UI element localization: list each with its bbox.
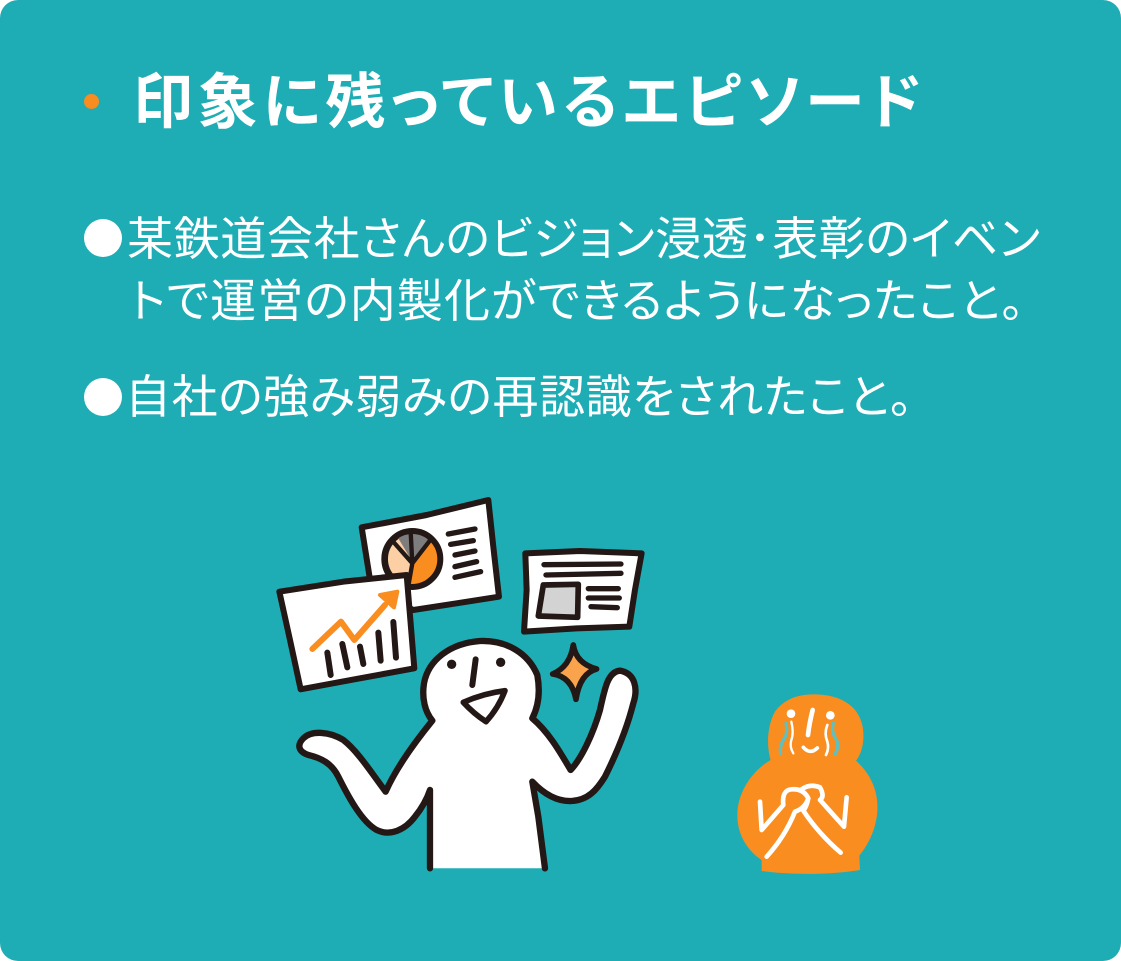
pie chart card [362, 500, 499, 610]
list bullet 2 [84, 378, 122, 416]
list bullet 1 [84, 219, 122, 257]
heading bullet [84, 94, 99, 109]
line chart card [279, 575, 414, 689]
mascot: orange crying figure [737, 694, 877, 874]
list item 1 line 2: トで運営の内製化ができるようになったこと。 [130, 275, 1025, 327]
list item 2: 自社の強み弱みの再認識をされたこと。 [125, 371, 913, 423]
person [299, 641, 635, 868]
document card [524, 551, 642, 632]
title: 印象に残っているエピソード [133, 69, 926, 136]
list item 1 line 1: 某鉄道会社さんのビジョン浸透･表彰のイベン [127, 213, 1041, 265]
